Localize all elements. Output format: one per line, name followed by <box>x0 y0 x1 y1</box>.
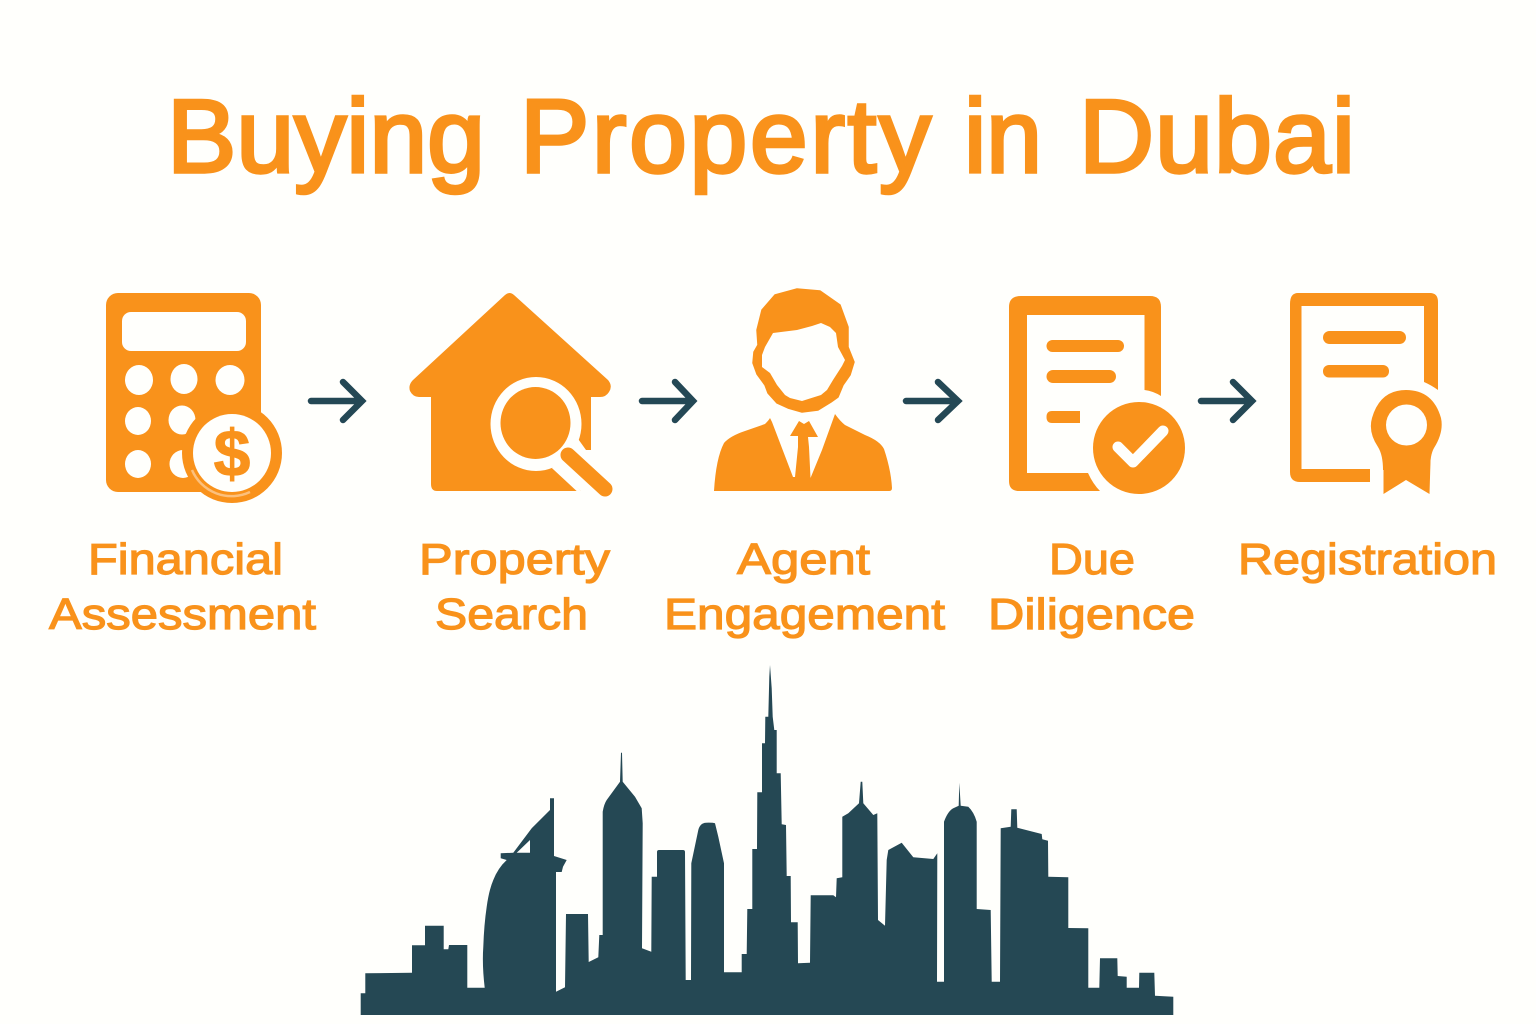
arrow 4 <box>1201 382 1252 420</box>
suit and tie <box>714 414 892 491</box>
title: Buying <box>167 79 485 195</box>
head <box>753 289 854 412</box>
title: Dubai <box>1079 79 1355 195</box>
label: Agent Engagement: Engagement <box>664 590 945 639</box>
label: Due Diligence <box>988 535 1195 639</box>
arrow 3 <box>906 382 958 420</box>
icon: document with check <box>1009 296 1185 494</box>
label: Financial Assessment: Assessment <box>49 590 316 639</box>
label: Agent Engagement <box>664 535 945 639</box>
label: Financial Assessment <box>49 535 316 639</box>
label: Property Search: Property <box>419 535 610 584</box>
Dubai skyline silhouette <box>361 665 1173 1015</box>
title: in <box>964 79 1042 195</box>
icon: registration certificate with ribbon <box>1290 293 1442 494</box>
dollar sign: $ <box>214 416 250 490</box>
magnifier handle <box>568 455 605 489</box>
arrow 1 <box>311 382 362 420</box>
icon: calculator with dollar coin <box>106 293 282 503</box>
label: Registration: Registration <box>1238 535 1497 584</box>
label: Property Search: Search <box>435 590 588 639</box>
ribbon <box>1384 445 1431 494</box>
label: Agent Engagement: Agent <box>737 535 870 584</box>
label: Due Diligence: Diligence <box>988 590 1195 639</box>
icon: house with magnifying glass <box>409 293 611 493</box>
label: Financial Assessment: Financial <box>88 535 283 584</box>
arrow 2 <box>642 382 693 420</box>
icon: agent person <box>714 289 892 491</box>
label: Due Diligence: Due <box>1049 535 1135 584</box>
label: Property Search <box>419 535 610 639</box>
title: Property <box>520 79 931 195</box>
title <box>167 79 1355 195</box>
check mark <box>1118 431 1163 462</box>
